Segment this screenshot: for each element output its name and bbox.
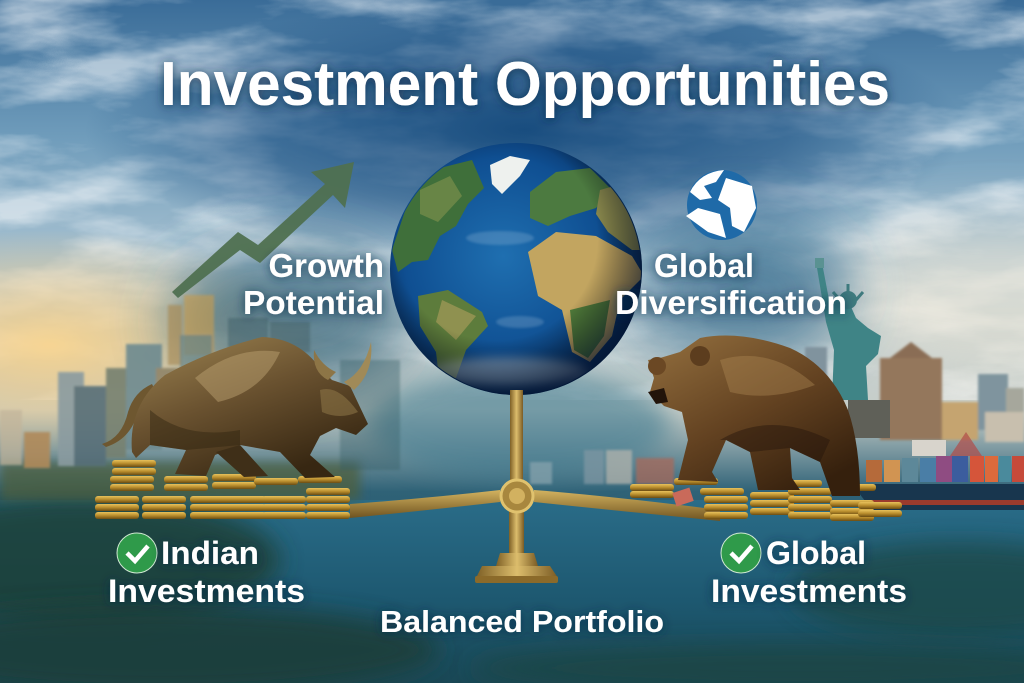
label: global investments: Global: [766, 535, 866, 571]
icon: statue of liberty: [815, 258, 890, 438]
label: growth potential: Potential: [243, 284, 384, 321]
globe: [390, 143, 650, 395]
label: global diversification: Diversification: [615, 284, 847, 321]
label: global investments: [711, 533, 907, 609]
label: indian investments: [108, 533, 305, 609]
label: growth potential: [243, 247, 384, 321]
label: indian investments: Indian: [161, 535, 259, 571]
cargo ship with containers: [852, 432, 1024, 510]
continent: europe: [530, 168, 612, 226]
city skyline: left: [0, 295, 310, 468]
faded central city and forest: [340, 360, 674, 484]
label: growth potential: Growth: [269, 247, 384, 284]
continent: greenland: [490, 156, 530, 194]
continent: north america: [392, 160, 484, 272]
continent: south america: [418, 290, 488, 386]
icon: green check: [721, 533, 761, 573]
icon: rising green growth arrow: [172, 162, 354, 298]
coin stacks: right: [630, 478, 902, 521]
label: global investments: Investments: [711, 573, 907, 609]
label: indian investments: Investments: [108, 573, 305, 609]
label: global diversification: [615, 247, 847, 321]
icon: green check: [117, 533, 157, 573]
title: Investment Opportunities: [160, 50, 890, 119]
city skyline, statue and ship: right: [805, 258, 1024, 510]
label: global diversification: Global: [654, 247, 754, 284]
continent: africa: [528, 232, 644, 362]
bull statue: [102, 337, 371, 478]
label: balanced portfolio: Balanced Portfolio: [380, 604, 664, 639]
icon: small white globe: [686, 170, 757, 240]
scale stand: [475, 390, 558, 583]
coin stacks: left: [95, 460, 350, 519]
bear statue: [648, 336, 860, 496]
continent: asia and arabia: [596, 187, 640, 250]
scale beam: [350, 480, 720, 521]
